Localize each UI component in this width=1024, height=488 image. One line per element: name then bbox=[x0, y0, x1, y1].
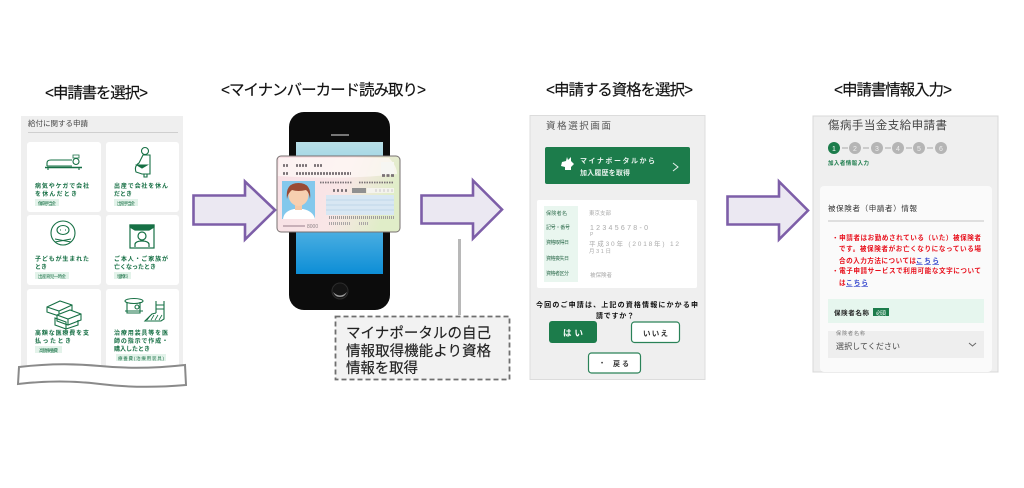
card: child born: 子どもが生まれた bbox=[35, 255, 89, 263]
icon: baby bbox=[51, 221, 75, 245]
icon: my number card: 8000 bbox=[307, 224, 318, 230]
card: expensive medical bills: 高額療養費 bbox=[39, 347, 58, 354]
notes in red: 合の入力方法については bbox=[839, 256, 916, 265]
step label: 加入者情報入力 bbox=[828, 159, 869, 167]
arrow: step 2 to step 3 bbox=[422, 180, 502, 238]
icon: pregnant person bbox=[135, 148, 150, 177]
card: treatment equipment: 購入したとき bbox=[114, 345, 150, 353]
card: expensive medical bills bbox=[27, 289, 101, 369]
button: get history from my portal: 加入履歴を取得 bbox=[580, 168, 630, 177]
notes in red: は bbox=[839, 279, 846, 287]
card: child born: 出産育児一時金 bbox=[38, 273, 66, 280]
notes in red: ・申請者はお勤めされている（いた）被保険者 bbox=[832, 233, 981, 242]
card: illness or injury: 病気やケガで会社 bbox=[35, 182, 89, 190]
qualification info table: 資格喪失日 bbox=[546, 255, 569, 262]
question text: 今回のご申請は、上記の資格情報にかかる申 bbox=[536, 300, 698, 309]
qualification info table: 被保険者 bbox=[590, 271, 612, 279]
step indicator: 2 bbox=[853, 146, 857, 153]
heading: select qualification: <申請する資格を選択> bbox=[546, 81, 693, 99]
card: childbirth leave: だとき bbox=[114, 190, 132, 198]
step indicator bbox=[828, 142, 947, 154]
card: treatment equipment bbox=[106, 289, 179, 369]
notes in red: こちら bbox=[916, 257, 939, 265]
icon: portrait bbox=[130, 225, 154, 248]
heading: my number card reading: <マイナンバーカード読み取り> bbox=[221, 81, 426, 99]
heading: enter application information: <申請書情報入力> bbox=[834, 81, 952, 99]
card: expensive medical bills: 高額な医療費を支 bbox=[35, 329, 89, 337]
insurer name dropdown: 保険者名称 bbox=[836, 330, 865, 337]
insurer name label row: 必須 bbox=[876, 309, 886, 317]
icon: smartphone bbox=[289, 112, 390, 310]
card: expensive medical bills: 払ったとき bbox=[35, 337, 71, 345]
step indicator: 1 bbox=[832, 146, 836, 153]
card: illness or injury: 傷病手当金 bbox=[38, 200, 56, 207]
button: back: 戻る bbox=[613, 360, 629, 368]
notes in red: です。被保険者がお亡くなりになっている場 bbox=[839, 244, 981, 253]
qualification info table: 記号・番号 bbox=[546, 224, 570, 231]
step indicator: 6 bbox=[939, 146, 943, 153]
qualification info table bbox=[537, 200, 697, 288]
panel: application information entry screen bbox=[813, 116, 998, 372]
screen title: 資格選択画面 bbox=[546, 120, 611, 132]
qualification info table: 資格取得日 bbox=[546, 239, 569, 246]
step indicator: 4 bbox=[896, 146, 900, 153]
card: treatment equipment: 治療用装具等を医 bbox=[114, 329, 168, 337]
insurer name dropdown bbox=[828, 330, 984, 358]
panel heading: benefits: 給付に関する申請 bbox=[28, 118, 88, 128]
callout: my portal self-information: マイナポータルの自己 bbox=[346, 325, 491, 342]
callout: my portal self-information: 情報取得機能より資格 bbox=[346, 343, 492, 360]
callout: my portal self-information bbox=[336, 316, 510, 380]
connector line to callout bbox=[458, 239, 461, 315]
button: no bbox=[632, 322, 680, 342]
notes in red bbox=[832, 233, 981, 287]
heading: select application: <申請書を選択> bbox=[45, 84, 148, 102]
card: childbirth leave: 出産手当金 bbox=[117, 200, 136, 207]
arrow: step 1 to step 2 bbox=[194, 182, 275, 240]
form card bbox=[820, 186, 992, 372]
photo portrait bbox=[282, 181, 315, 219]
callout: my portal self-information: 情報を取得 bbox=[346, 360, 418, 377]
button: back: • bbox=[601, 361, 603, 367]
qualification info table: 12345678-0 bbox=[590, 225, 648, 232]
icon: my number card bbox=[277, 156, 400, 232]
card: illness or injury bbox=[27, 142, 101, 212]
torn paper edge bbox=[18, 364, 186, 387]
card: childbirth leave bbox=[106, 142, 179, 212]
icon: medical equipment bbox=[125, 298, 164, 321]
button: back bbox=[588, 353, 640, 373]
card: death of insured or family: 埋葬料 bbox=[117, 273, 128, 280]
button: no: いいえ bbox=[643, 328, 668, 338]
notes in red: こちら bbox=[846, 279, 868, 287]
card: treatment equipment: 療養費(治療用装具) bbox=[118, 355, 164, 362]
notes in red: ・電子申請サービスで利用可能な文字について bbox=[832, 266, 981, 275]
card: child born bbox=[27, 215, 101, 285]
qualification info table: 保険者名 bbox=[546, 210, 567, 217]
qualification info table: 東京支部 bbox=[589, 209, 611, 217]
card: death of insured or family: 亡くなったとき bbox=[114, 263, 156, 271]
step indicator: 5 bbox=[917, 146, 921, 153]
section title: 被保険者（申請者）情報 bbox=[828, 203, 918, 213]
insurer name label row: 保険者名称 bbox=[834, 308, 870, 317]
qualification info table: 資格者区分 bbox=[546, 270, 569, 277]
qualification info table: P bbox=[590, 232, 594, 238]
card: child born: とき bbox=[35, 264, 47, 271]
qualification info table: 月31日 bbox=[589, 248, 611, 255]
qualification info table: 平成30年 (2018年) 12 bbox=[589, 239, 679, 248]
panel: qualification selection screen: 請ですか？ bbox=[596, 311, 634, 320]
button: yes bbox=[549, 321, 597, 343]
button: get history from my portal: マイナポータルから bbox=[580, 156, 655, 165]
insurer name label row bbox=[828, 299, 984, 323]
insurer name dropdown: 選択してください bbox=[836, 341, 900, 351]
icon: bed bbox=[45, 155, 82, 170]
panel: qualification selection screen bbox=[530, 116, 705, 380]
card: childbirth leave: 出産で会社を休ん bbox=[114, 182, 168, 190]
button: yes: はい bbox=[563, 328, 583, 338]
icon: banknote bundles bbox=[47, 301, 81, 329]
form title: 傷病手当金支給申請書 bbox=[828, 118, 947, 132]
panel: application selection screen bbox=[21, 116, 183, 372]
card: death of insured or family: ご本人・ご家族が bbox=[114, 255, 168, 263]
button: get history from my portal bbox=[545, 147, 690, 184]
arrow: step 3 to step 4 bbox=[728, 182, 808, 240]
step indicator: 3 bbox=[875, 146, 879, 153]
card: illness or injury: を休んだとき bbox=[35, 190, 77, 198]
card: death of insured or family bbox=[106, 215, 179, 285]
card: treatment equipment: 師の指示で作成・ bbox=[114, 337, 168, 345]
